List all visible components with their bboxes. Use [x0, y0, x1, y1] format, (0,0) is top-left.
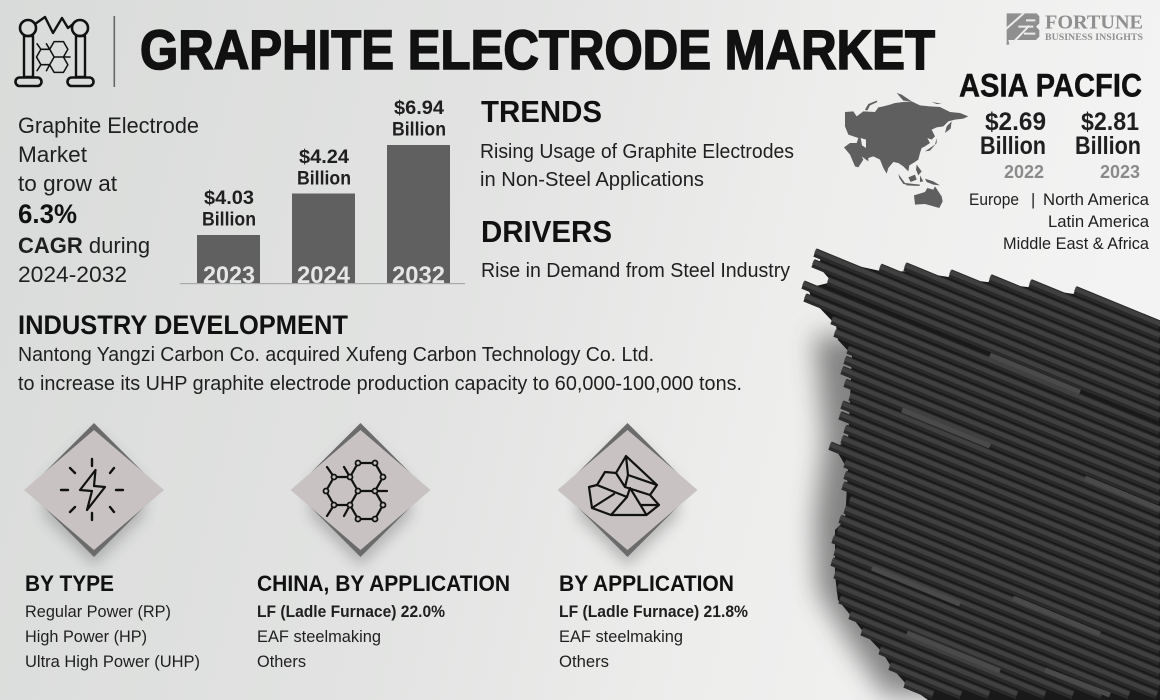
bar chart: market size: 2023 [203, 262, 255, 289]
logo: Fortune Business Insights: FORTUNE [1045, 11, 1143, 33]
segment: by type: Ultra High Power (UHP) [25, 653, 200, 671]
text block: market growth: CAGR during [18, 233, 150, 258]
segment: by type: High Power (HP) [25, 628, 147, 646]
segment: by application: BY APPLICATION [559, 571, 734, 596]
segment: by application: Others [559, 653, 609, 671]
icon: graphite rock diamond [558, 423, 698, 566]
text block: other regions: North America [1043, 191, 1150, 209]
text block: other regions: Europe [969, 191, 1019, 209]
segment: China by application: EAF steelmaking [257, 628, 381, 646]
icon: electrodes with arc [16, 17, 94, 86]
drivers: Rise in Demand from Steel Industry [481, 260, 790, 282]
drivers: DRIVERS [481, 214, 612, 249]
region: Asia Pacific values: 2022 [1004, 162, 1044, 182]
region: Asia Pacific values [959, 68, 1142, 182]
bar chart: market size [180, 97, 465, 289]
region: Asia Pacific values: Billion [980, 132, 1046, 160]
text block: other regions: | [1031, 191, 1035, 209]
trends: TRENDS [481, 94, 602, 129]
trends: Rising Usage of Graphite Electrodes [480, 141, 794, 163]
text block: market growth: 2024-2032 [18, 262, 127, 287]
industry development: to increase its UHP graphite electrode production capacity to 60,000-100,000 tons. [18, 373, 742, 395]
region: Asia Pacific values: 2023 [1100, 162, 1140, 182]
photo: graphite electrode rods [803, 251, 1160, 700]
text block: other regions [969, 191, 1150, 253]
region: Asia Pacific values: Billion [1075, 132, 1141, 160]
bar chart: market size: 2024 [297, 262, 350, 289]
industry development: Nantong Yangzi Carbon Co. acquired Xufeng Carbon Technology Co. Ltd. [18, 344, 654, 366]
trends: in Non-Steel Applications [480, 169, 704, 191]
text block: market growth: Market [18, 142, 87, 167]
drivers [481, 214, 790, 282]
bar chart: market size: Billion [392, 118, 446, 140]
text block: other regions: Latin America [1048, 213, 1150, 231]
bar chart: market size: $4.03 [204, 187, 254, 209]
icon: graphite lattice diamond [290, 423, 430, 566]
map: Asia Pacific [844, 93, 968, 208]
bar chart: market size: $6.94 [394, 97, 444, 119]
title: GRAPHITE ELECTRODE MARKET [140, 18, 935, 81]
bar chart: market size: 2032 [392, 262, 445, 289]
segment: by application: EAF steelmaking [559, 628, 683, 646]
industry development [18, 310, 742, 395]
segment: China by application [257, 571, 510, 671]
bar chart: market size: $4.24 [299, 146, 349, 168]
icon: power diamond [24, 423, 164, 566]
segment: by type: Regular Power (RP) [25, 603, 171, 621]
logo: Fortune Business Insights: BUSINESS INSIGHTS [1045, 33, 1143, 43]
segment: by type [25, 571, 200, 671]
segment: by type: BY TYPE [25, 571, 114, 596]
industry development: INDUSTRY DEVELOPMENT [18, 310, 348, 340]
text block: market growth: 6.3% [18, 199, 77, 229]
text block: market growth: Graphite Electrode [18, 113, 199, 138]
bar chart: market size: Billion [202, 208, 256, 230]
logo: Fortune Business Insights [1006, 11, 1143, 45]
segment: China by application: Others [257, 653, 306, 671]
region: Asia Pacific values: $2.81 [1081, 108, 1139, 136]
text block: market growth: to grow at [18, 171, 117, 196]
text block: other regions: Middle East & Africa [1003, 235, 1150, 253]
header divider [114, 16, 115, 87]
bar chart: market size: Billion [297, 168, 351, 190]
segment: China by application: CHINA, BY APPLICATION [257, 571, 510, 596]
region: Asia Pacific values: $2.69 [985, 108, 1046, 136]
region: Asia Pacific values: ASIA PACFIC [959, 68, 1142, 104]
segment: by application: LF (Ladle Furnace) 21.8% [559, 603, 748, 621]
segment: China by application: LF (Ladle Furnace) 22.0% [257, 603, 445, 621]
segment: by application [559, 571, 748, 671]
text block: market growth [18, 113, 199, 287]
trends [480, 94, 794, 191]
